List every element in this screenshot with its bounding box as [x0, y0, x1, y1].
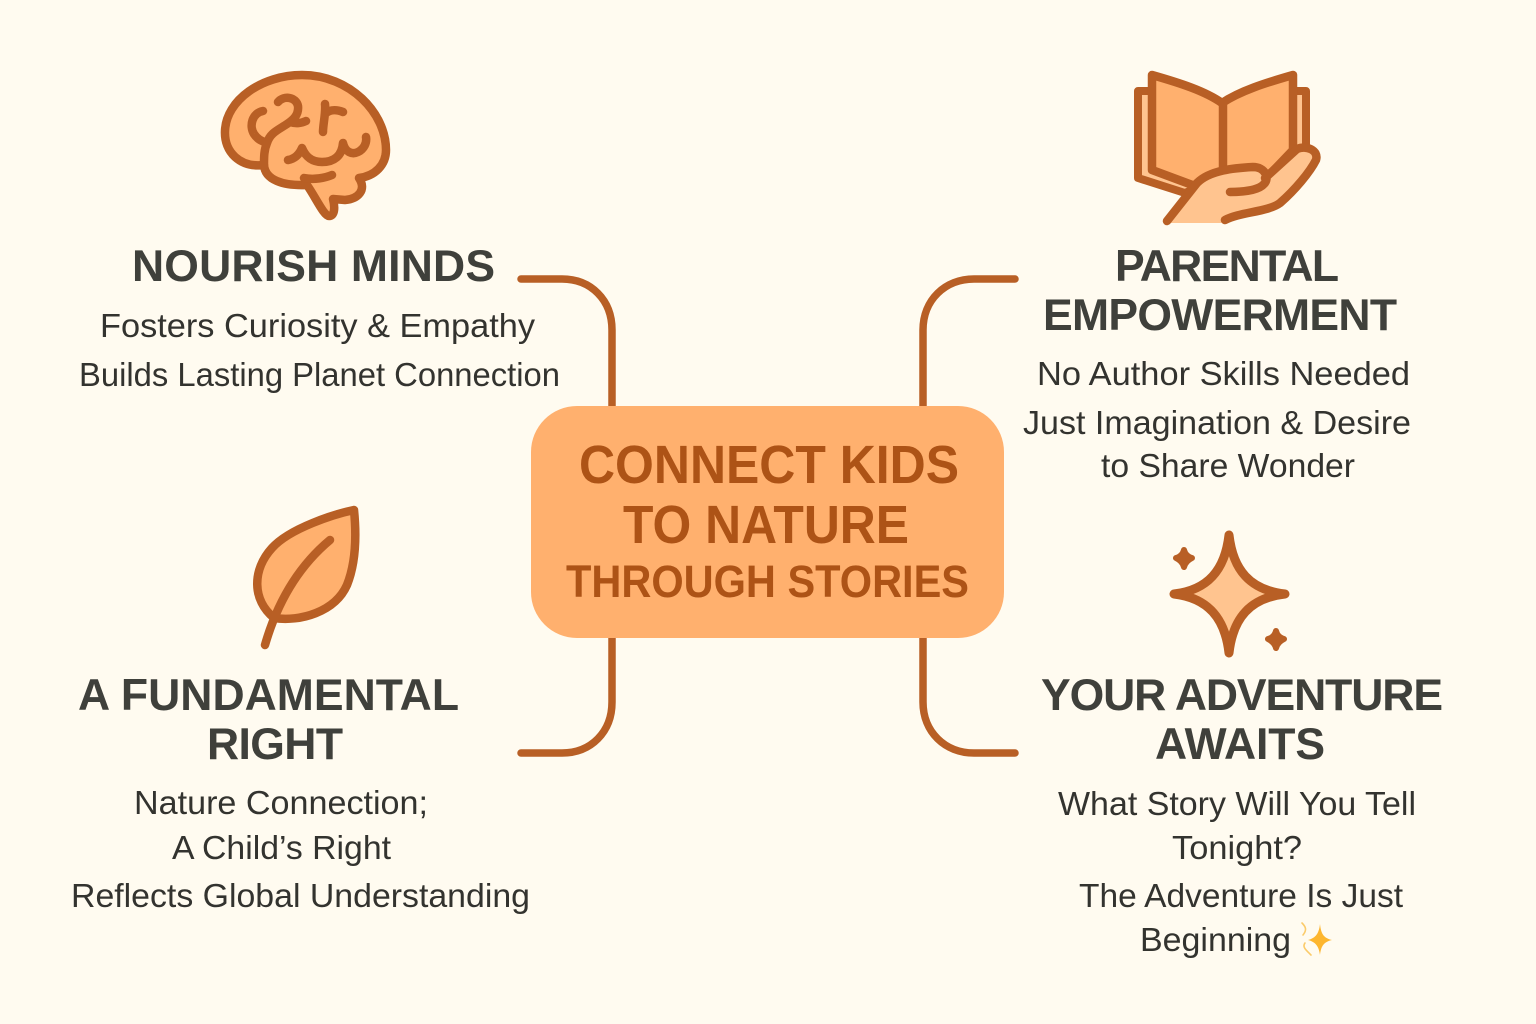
heading: nourish minds: NOURISH MINDS [132, 242, 495, 291]
heading: your adventure awaits [1041, 671, 1443, 769]
connector: top right [923, 279, 1015, 412]
central title [566, 435, 969, 607]
heading: parental empowerment: PARENTAL [1115, 242, 1339, 291]
connector: top left [521, 279, 612, 412]
text: your adventure awaits details: The Adventure Is Just [1079, 877, 1403, 914]
text: your adventure awaits details [1058, 785, 1416, 958]
icon: sparkles [1174, 535, 1285, 653]
text: parental empowerment details: No Author Skills Needed [1037, 355, 1410, 392]
icon: leaf [257, 510, 355, 645]
central title: TO NATURE [623, 495, 909, 555]
icon: book and hand [1138, 75, 1316, 223]
heading: a fundamental right [78, 671, 459, 769]
text: your adventure awaits details: Beginning [1140, 921, 1291, 958]
text: a fundamental right details: Nature Connection; [134, 784, 428, 821]
text: parental empowerment details: to Share Wonder [1101, 447, 1355, 484]
icon: small yellow sparkle [1302, 923, 1332, 955]
text: parental empowerment details: Just Imagination & Desire [1023, 404, 1411, 441]
central panel [531, 406, 1004, 638]
heading: a fundamental right: RIGHT [207, 720, 343, 769]
text: a fundamental right details: A Child’s Right [172, 829, 391, 866]
icon: brain [225, 75, 386, 216]
heading: parental empowerment: EMPOWERMENT [1043, 291, 1397, 340]
text: your adventure awaits details: Tonight? [1172, 829, 1302, 866]
text: a fundamental right details [71, 784, 530, 914]
central title: CONNECT KIDS [579, 435, 959, 495]
connector: bottom left [521, 632, 612, 753]
heading: a fundamental right: A FUNDAMENTAL [78, 671, 459, 720]
text: nourish minds details: Fosters Curiosity & Empathy [100, 307, 536, 344]
central title: THROUGH STORIES [566, 556, 969, 607]
heading: your adventure awaits: AWAITS [1155, 720, 1325, 769]
text: nourish minds details: Builds Lasting Planet Connection [79, 356, 560, 393]
heading: parental empowerment [1043, 242, 1397, 340]
heading: your adventure awaits: YOUR ADVENTURE [1041, 671, 1443, 720]
text: a fundamental right details: Reflects Global Understanding [71, 877, 530, 914]
text: nourish minds details [79, 307, 560, 393]
connector: bottom right [923, 632, 1015, 753]
text: your adventure awaits details: What Story Will You Tell [1058, 785, 1416, 822]
text: parental empowerment details [1023, 355, 1411, 484]
